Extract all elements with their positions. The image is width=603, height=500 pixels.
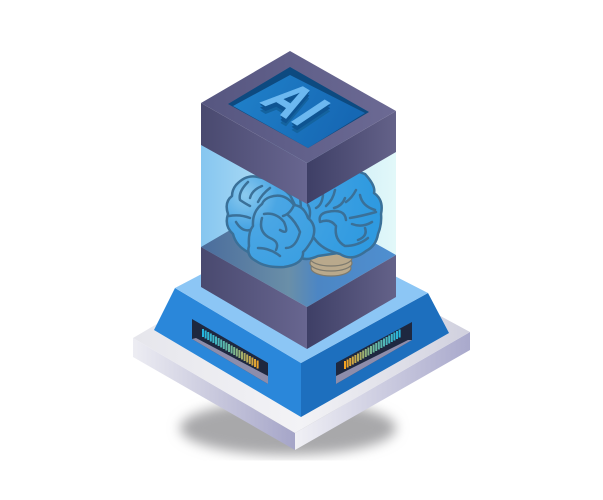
glass column [201,140,396,310]
ground shadow [180,401,396,455]
recessed blue screen [228,67,369,148]
AI lettering: AI [248,76,344,137]
lower block top face [201,195,396,307]
AI lettering: AI [248,79,344,140]
top cap right face [307,111,396,204]
brain [227,165,382,267]
right LED bar [345,330,400,369]
central brain mass [280,165,345,259]
left hemisphere [227,176,300,255]
lower block left face [201,247,307,349]
front lobe folds [258,205,300,256]
front lobe [248,196,314,267]
top cap left face [201,103,307,204]
blue base [154,225,449,417]
left display slot [192,319,268,384]
lower block right face [307,255,396,349]
top cap top face [201,51,396,163]
AI lettering: AI [248,82,344,143]
right hemisphere folds [308,190,376,246]
AI lettering: AI [248,74,344,135]
brain stem [310,250,352,276]
white platform [133,240,470,450]
right hemisphere [300,165,382,257]
left LED bar [203,329,258,368]
right display slot [336,322,412,384]
left hemisphere folds [229,182,270,230]
